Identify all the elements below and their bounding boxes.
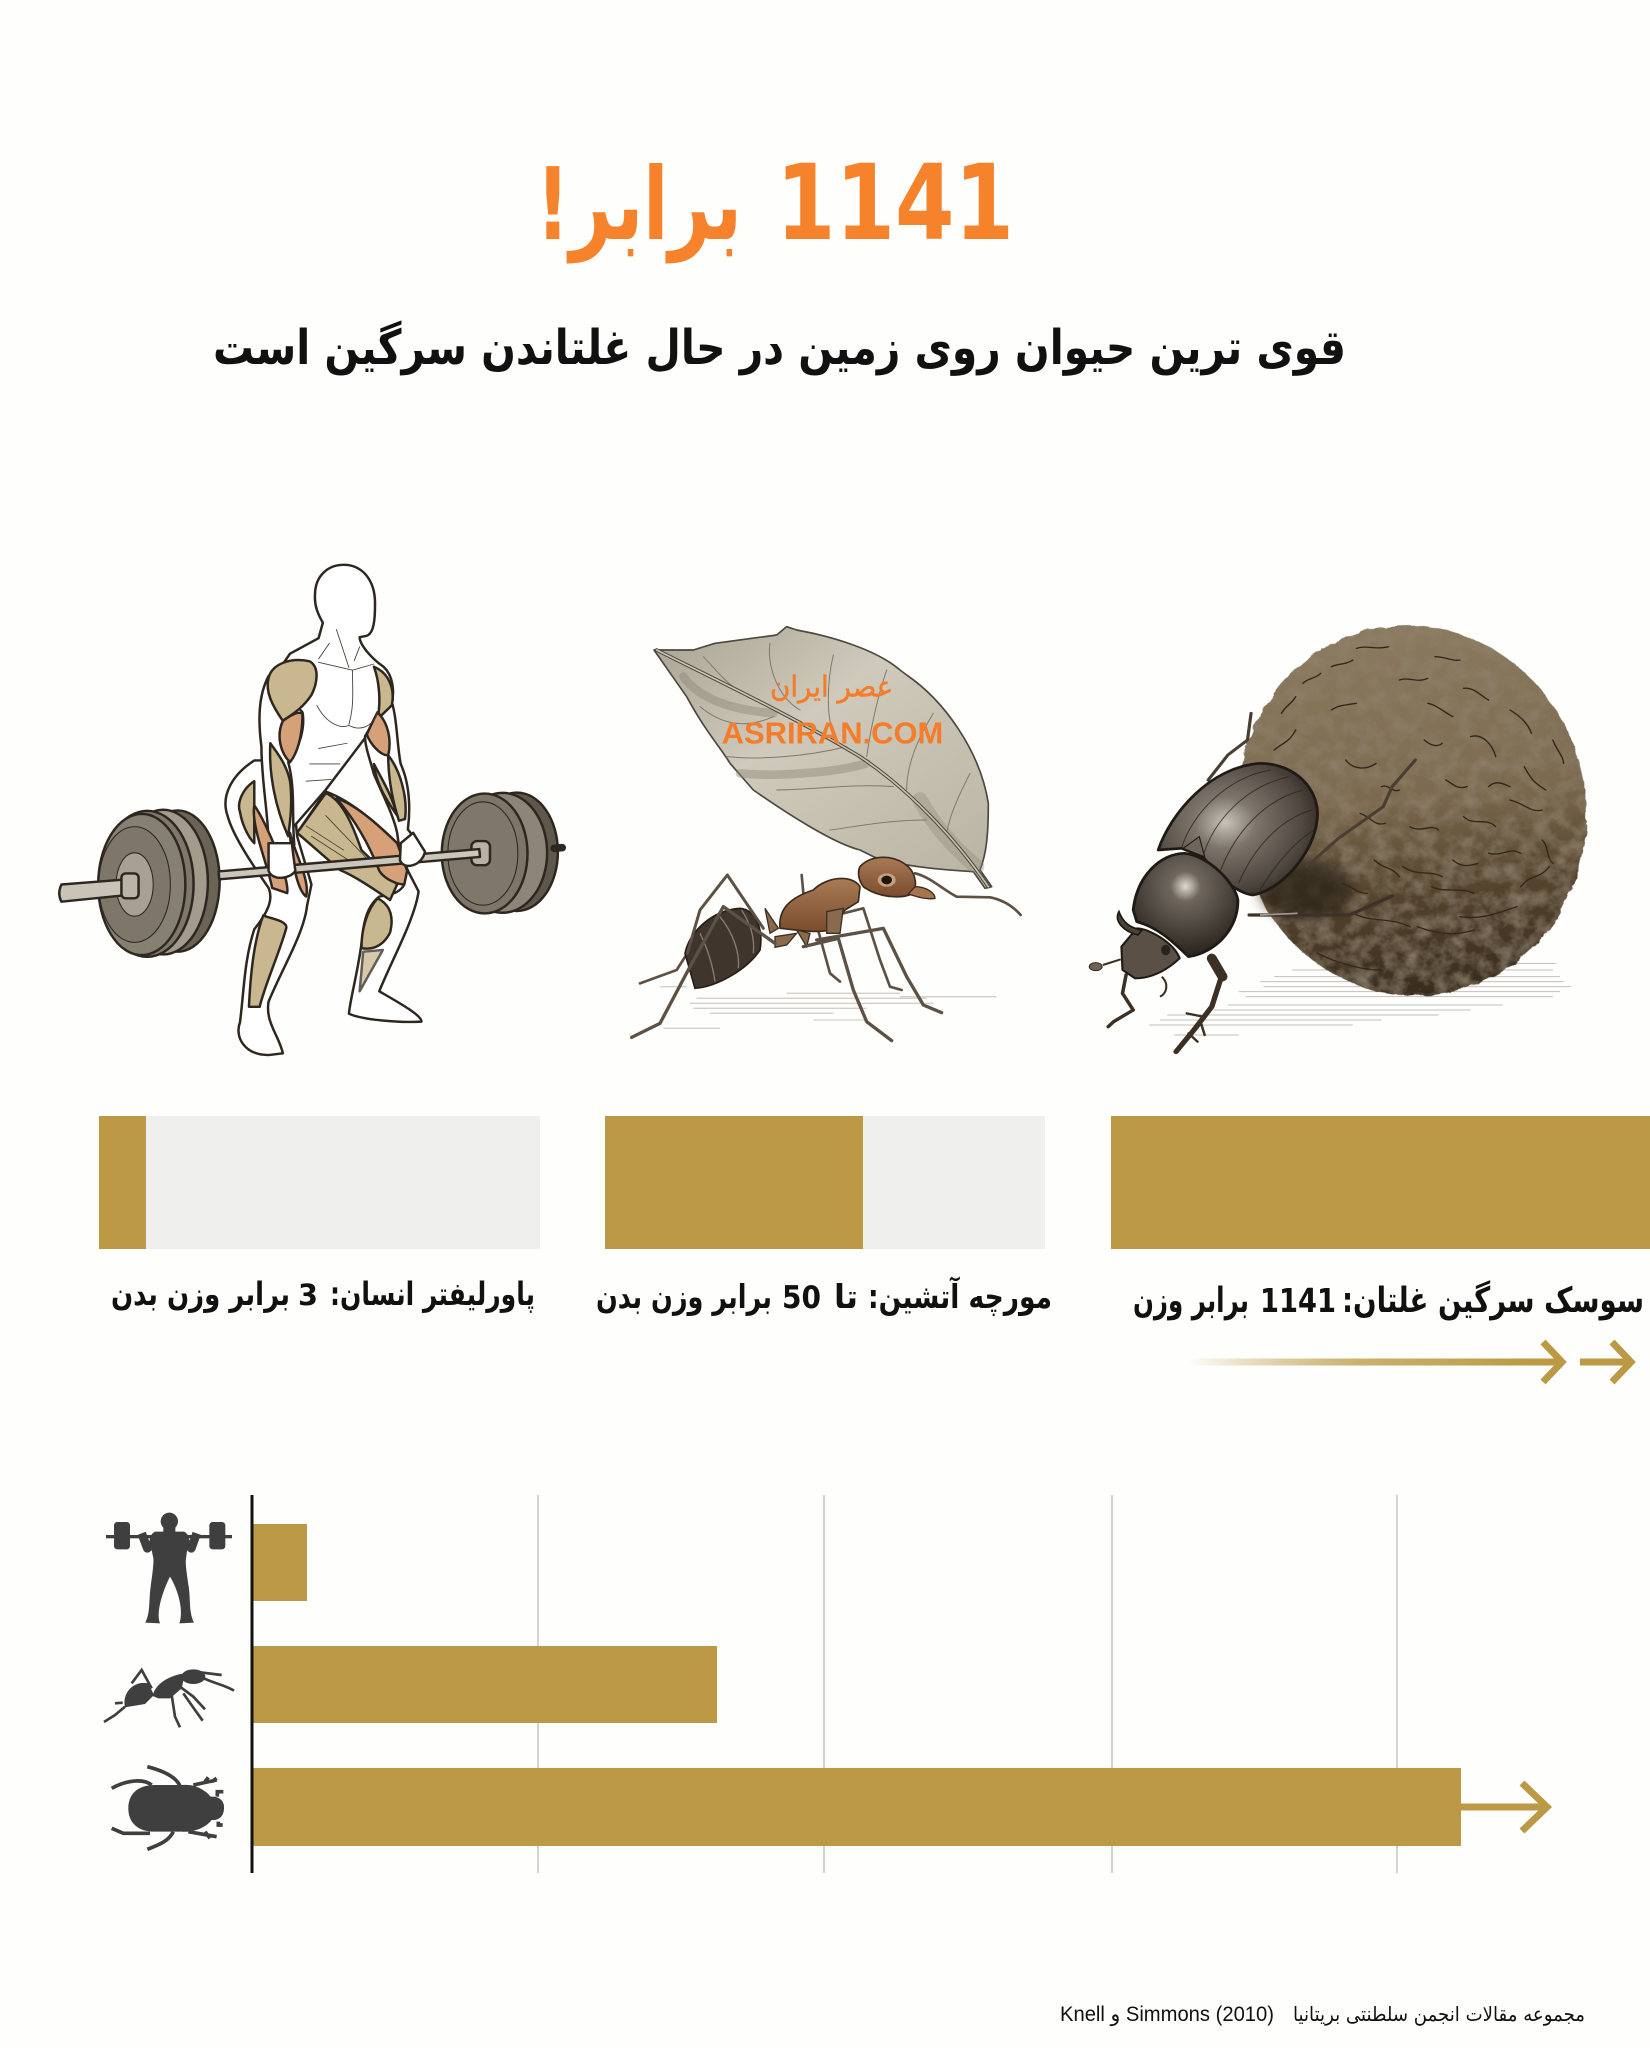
ant antenna bbox=[915, 873, 1021, 915]
icon: right barbell plates bbox=[442, 793, 562, 913]
ant coxae bbox=[797, 908, 843, 947]
label: powerlifter: برابر وزن بدن bbox=[111, 1275, 290, 1313]
title: برابر! bbox=[536, 146, 742, 264]
label: ant: برابر وزن بدن bbox=[596, 1277, 772, 1317]
muscles bbox=[239, 660, 407, 1007]
ball cracks bbox=[1274, 647, 1564, 970]
beetle scutellum bbox=[1183, 837, 1205, 857]
abdomen bands bbox=[700, 910, 754, 982]
icon: left barbell plates bbox=[98, 810, 220, 957]
barbell bar bbox=[219, 849, 480, 879]
beetle hind leg bbox=[1249, 896, 1392, 915]
figure: legs bbox=[225, 760, 421, 1055]
title bbox=[536, 142, 1014, 264]
ground shadow bbox=[1149, 963, 1571, 1035]
beetle head bbox=[1121, 928, 1180, 978]
ground shadow bbox=[660, 987, 997, 1028]
icon: beetle silhouette bbox=[112, 1767, 224, 1849]
leaf midrib bbox=[657, 650, 988, 887]
hands on the bar bbox=[269, 833, 425, 878]
icon: lifter silhouette bbox=[106, 1513, 232, 1623]
label: ant bbox=[596, 1276, 1052, 1317]
ant thorax bbox=[780, 878, 860, 931]
label: beetle: 1141 bbox=[1260, 1281, 1336, 1320]
title: 1141 bbox=[776, 142, 1014, 264]
beetle eye bbox=[1161, 945, 1170, 955]
label: ant: 50 bbox=[782, 1280, 821, 1316]
beetle antennae bbox=[1103, 959, 1121, 965]
strength bar: powerlifter bbox=[99, 1116, 540, 1249]
ant abdomen bbox=[685, 908, 761, 988]
chart grid lines bbox=[538, 1495, 1397, 1873]
label: ant: تا bbox=[834, 1277, 858, 1316]
ant far legs bbox=[640, 875, 902, 990]
label: ant: مورچه آتشین: bbox=[868, 1276, 1052, 1317]
beetle elytra bbox=[1158, 763, 1317, 895]
elytra lines bbox=[1181, 770, 1314, 890]
chart bar: powerlifter bbox=[253, 1524, 307, 1601]
beetle middle leg bbox=[1306, 760, 1415, 867]
illustration: fire ant carrying leaf bbox=[632, 627, 1021, 1041]
icon: ant silhouette bbox=[104, 1669, 234, 1727]
chart arrow bbox=[1461, 1783, 1547, 1831]
torso lines bbox=[306, 630, 377, 864]
strength bar: beetle bbox=[1111, 1116, 1650, 1249]
beetle pronotum bbox=[1133, 853, 1238, 957]
beetle front legs bbox=[1108, 958, 1222, 1052]
figure: arms bbox=[259, 676, 424, 859]
subtitle: قوی ترین حیوان روی زمین در حال غلتاندن سرگین است bbox=[213, 320, 1346, 376]
dung ball bbox=[1218, 609, 1606, 1012]
ant eye bbox=[878, 873, 896, 887]
leaf veins bbox=[683, 643, 977, 867]
watermark: Persian: عصر ایران bbox=[770, 670, 893, 704]
barbell left sleeve bbox=[59, 873, 139, 902]
leaf bbox=[654, 627, 992, 888]
icons in chart bbox=[104, 1513, 234, 1849]
label: powerlifter: 3 bbox=[298, 1278, 318, 1312]
figure: head and torso bbox=[269, 565, 393, 828]
bar chart bbox=[252, 1495, 1547, 1873]
source: authors: (2010) Simmons و Knell bbox=[1060, 2003, 1274, 2027]
source: Persian: مجموعه مقالات انجمن سلطنتی بریتانیا bbox=[1293, 2002, 1585, 2026]
beetle horn bbox=[1118, 912, 1142, 935]
illustration: dung beetle rolling ball bbox=[1089, 609, 1606, 1052]
label: beetle bbox=[1133, 1280, 1644, 1321]
chart bar: ant bbox=[253, 1646, 717, 1723]
ant mandible bbox=[908, 887, 935, 899]
arrow: long gradient bbox=[1188, 1342, 1562, 1382]
watermark: Latin: ASRIRAN.COM bbox=[722, 716, 943, 750]
label: powerlifter bbox=[111, 1275, 535, 1313]
shaded area of ball behind beetle bbox=[1260, 860, 1353, 920]
chart bar: beetle bbox=[253, 1768, 1461, 1846]
ant near legs bbox=[632, 875, 942, 1041]
illustration: powerlifter bbox=[59, 565, 562, 1055]
label: beetle: برابر وزن bbox=[1133, 1281, 1249, 1321]
arrow: short bbox=[1580, 1342, 1631, 1382]
beetle rear leg on ball bbox=[1208, 713, 1251, 780]
label: powerlifter: پاورلیفتر انسان: bbox=[330, 1275, 535, 1313]
ant head bbox=[859, 857, 915, 897]
strength bar: ant bbox=[605, 1116, 1045, 1249]
chart axis bbox=[250, 1495, 254, 1873]
ant waist bbox=[765, 908, 797, 947]
